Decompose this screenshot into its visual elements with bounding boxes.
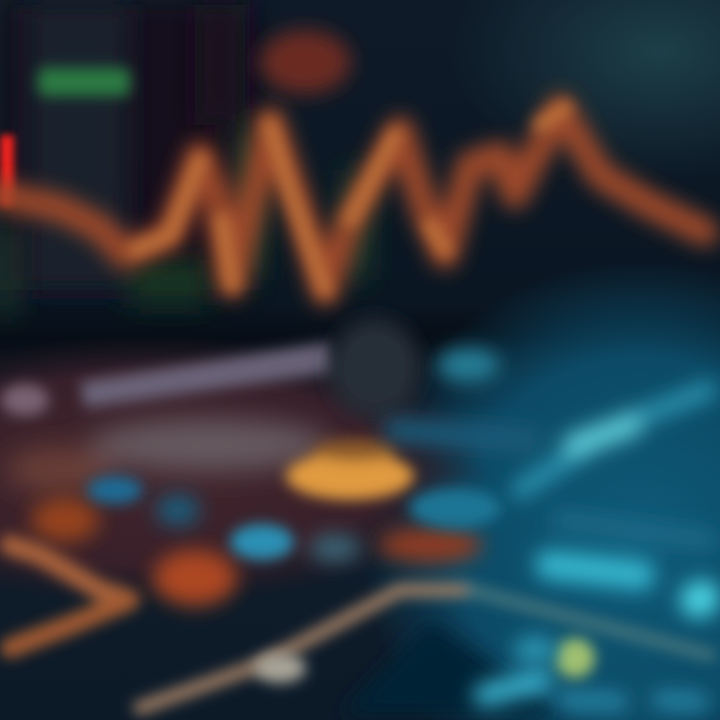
icon: grey dark pillar — [329, 318, 421, 418]
nodes: orange and blue discs — [31, 476, 501, 606]
glow: yellow-green node — [555, 638, 595, 678]
highlight: red marker — [0, 135, 14, 205]
glow: cyan halo — [513, 636, 557, 664]
band: grey data strip — [1, 342, 335, 416]
band: warm grey mid strip — [5, 419, 330, 492]
glow: cyan spot — [436, 348, 500, 382]
glow: pale node — [254, 653, 306, 683]
line chart: orange price line — [0, 108, 705, 292]
network: tan connector lines — [10, 545, 710, 708]
highlight: yellow block — [286, 439, 414, 500]
highlight: red blob — [259, 30, 351, 94]
panel: trading screen columns — [0, 5, 369, 315]
network: cyan light streaks — [395, 390, 708, 702]
highlight: green bar — [38, 68, 130, 96]
